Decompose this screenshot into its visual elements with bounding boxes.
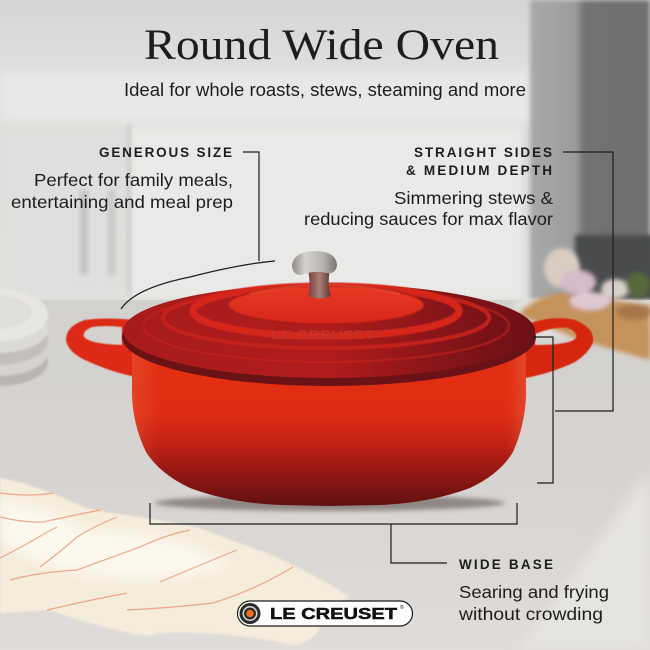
callout: generous size: GENEROUS SIZE <box>99 145 232 160</box>
callout: straight sides: & MEDIUM DEPTH <box>406 163 552 178</box>
cutting board with garlic and herbs <box>518 248 650 360</box>
lid rim <box>122 288 536 386</box>
dish towel <box>0 478 350 645</box>
callout: generous size: entertaining and meal prep <box>11 192 233 212</box>
title: Round Wide Oven <box>144 22 499 69</box>
logo: Le Creuset <box>238 601 412 626</box>
right handle <box>515 318 593 379</box>
straight sides leader <box>555 152 613 411</box>
wide base bracket <box>150 503 517 524</box>
logo: Le Creuset: ® <box>400 604 404 611</box>
callout: straight sides <box>304 145 553 229</box>
callout: wide base: WIDE BASE <box>459 557 553 572</box>
callout lines <box>121 152 613 563</box>
body <box>132 345 526 506</box>
logo: Le Creuset: LE CREUSET <box>270 606 397 623</box>
knob <box>292 251 337 298</box>
refrigerator <box>530 0 650 300</box>
wide oven pot <box>66 251 593 506</box>
left handle <box>66 318 145 378</box>
callout: straight sides: STRAIGHT SIDES <box>414 145 552 160</box>
callout: wide base: Searing and frying <box>459 582 609 602</box>
plates stack <box>0 289 48 386</box>
callout: wide base: without crowding <box>458 604 603 624</box>
callout: straight sides: Simmering stews & <box>394 188 553 208</box>
pot shadow <box>155 495 505 511</box>
callout: generous size <box>11 145 233 212</box>
generous size leader <box>243 152 259 261</box>
callout: straight sides: reducing sauces for max flavor <box>304 209 553 229</box>
lid dome <box>123 284 535 378</box>
subtitle: Ideal for whole roasts, stews, steaming and more <box>124 80 526 100</box>
callout: wide base <box>458 557 609 624</box>
embossed lid wordmark: LE CREUSET <box>271 328 376 342</box>
countertop <box>0 300 650 650</box>
callout: generous size: Perfect for family meals, <box>34 170 233 190</box>
